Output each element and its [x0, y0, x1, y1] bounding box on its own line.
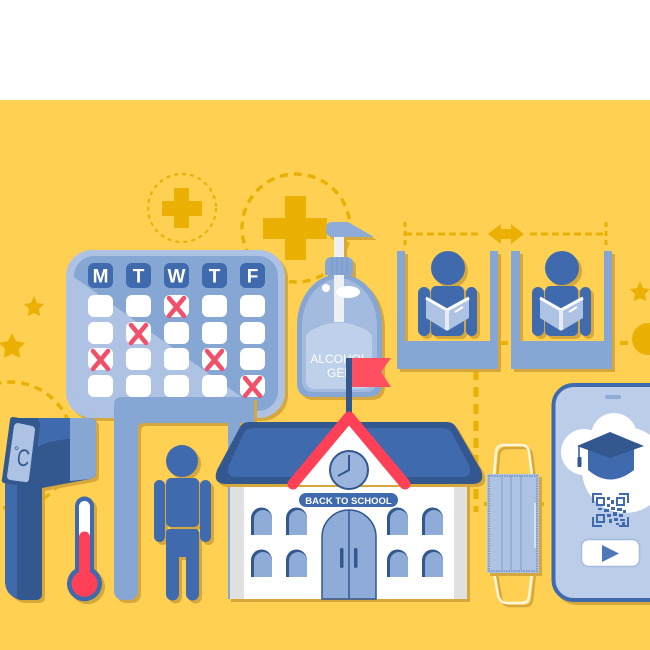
alcohol gel bottle: ALCOHOL [310, 352, 368, 366]
back to school sign [299, 493, 398, 507]
calendar day cells [88, 295, 265, 397]
school door [322, 510, 376, 599]
calendar day headers: M [93, 266, 108, 288]
infrared thermometer gun [2, 417, 96, 600]
calendar board [66, 250, 285, 418]
background decoration: plus signs, stars and dashed paths [0, 174, 650, 512]
face mask [487, 445, 539, 603]
screening gate frame [114, 397, 254, 600]
alcohol gel bottle: GEL [327, 366, 351, 380]
calendar day headers [88, 263, 265, 288]
graduation cap [577, 432, 644, 480]
calendar day headers: W [168, 266, 186, 288]
white cloud [561, 413, 650, 513]
play button [582, 540, 640, 566]
infrared thermometer gun: ° [13, 443, 20, 459]
calendar day headers: T [133, 266, 145, 288]
back to school sign: BACK TO SCHOOL [305, 496, 392, 507]
flagpole and red flag [346, 358, 391, 418]
liquid thermometer [67, 496, 102, 601]
desk and reader right [511, 251, 612, 369]
school building [216, 358, 482, 599]
QR code [592, 493, 629, 527]
calendar absence crosses [93, 298, 260, 396]
distance measure line with arrow [405, 222, 606, 246]
calendar day headers: F [247, 266, 258, 288]
smartphone [554, 385, 650, 600]
infrared thermometer gun: C [15, 445, 31, 472]
school windows [251, 508, 443, 577]
alcohol gel bottle [297, 222, 382, 397]
calendar day headers: T [209, 266, 221, 288]
desk and reader left [397, 251, 498, 369]
standing person [154, 445, 211, 601]
school clock [330, 451, 368, 489]
school roof [216, 422, 482, 484]
